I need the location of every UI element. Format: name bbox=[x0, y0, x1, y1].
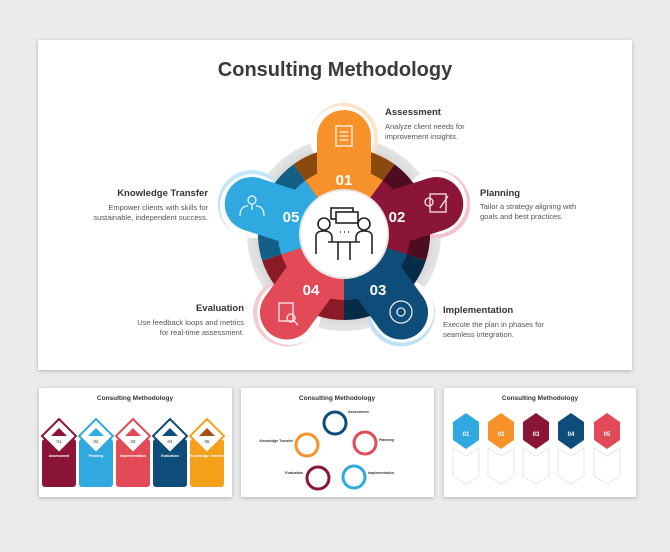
label: Knowledge Transfer bbox=[93, 188, 209, 222]
thumbnail 1: diamond cards: Knowledge Transfer bbox=[190, 454, 224, 458]
numbers: 05 bbox=[283, 209, 299, 226]
icons in lobes bbox=[240, 126, 448, 325]
thumbnail 3: hexagon columns bbox=[444, 388, 636, 497]
thumbnail 1: diamond cards: Implementation bbox=[120, 454, 146, 458]
label: Planning bbox=[480, 188, 576, 221]
label: Knowledge Transfer: Knowledge Transfer bbox=[117, 188, 208, 199]
thumbnail 1: diamond cards: Consulting Methodology bbox=[97, 395, 173, 402]
petal 03 bbox=[313, 211, 448, 357]
thumbnail 3: hexagon columns: 05 bbox=[604, 432, 611, 438]
diagram: five-petal cycle bbox=[209, 103, 479, 360]
label: Planning: goals and best practices. bbox=[480, 212, 563, 221]
label: Evaluation: Use feedback loops and metrics bbox=[137, 318, 244, 327]
halos bbox=[209, 103, 479, 360]
thumbnail 1: diamond cards: 05 bbox=[204, 439, 210, 444]
thumbnail 3: hexagon columns: 03 bbox=[533, 432, 540, 438]
label: Assessment: Analyze client needs for bbox=[385, 122, 465, 131]
numbers: 02 bbox=[389, 209, 405, 226]
petal 01 bbox=[305, 110, 383, 234]
label: Assessment bbox=[385, 107, 465, 141]
thumbnail 2: circular arrows bbox=[241, 388, 434, 497]
center circle with meeting icon bbox=[300, 190, 388, 278]
thumbnail 2: circular arrows: Planning bbox=[379, 438, 394, 442]
thumbnail 1: diamond cards: 04 bbox=[167, 439, 173, 444]
petal 02 bbox=[332, 159, 474, 271]
thumbnail 1: diamond cards: Assessment bbox=[49, 454, 70, 458]
main slide bbox=[38, 40, 632, 370]
label: Implementation bbox=[443, 305, 544, 339]
thumbnail 2: circular arrows: Assessment bbox=[348, 410, 369, 414]
thumbnail 1: diamond cards: Evaluation bbox=[161, 454, 179, 458]
label: Assessment: improvement insights. bbox=[385, 132, 458, 141]
numbers: 04 bbox=[303, 282, 320, 299]
label: Evaluation: for real-time assessment. bbox=[160, 328, 244, 337]
thumbnail 3: hexagon columns: 02 bbox=[498, 432, 505, 438]
thumbnail 1: diamond cards: 03 bbox=[130, 439, 136, 444]
label: Knowledge Transfer: Empower clients with skills for bbox=[108, 203, 209, 212]
label: Evaluation: Evaluation bbox=[196, 303, 244, 314]
numbers: 01 bbox=[336, 172, 352, 189]
thumbnail 1: diamond cards: 01 bbox=[56, 439, 62, 444]
label: Planning: Planning bbox=[480, 188, 520, 199]
thumbnail 1: diamond cards: 02 bbox=[93, 439, 99, 444]
thumbnail 3: hexagon columns: 04 bbox=[568, 432, 575, 438]
thumbnail 3: hexagon columns: 01 bbox=[463, 432, 470, 438]
numbers: 03 bbox=[370, 282, 386, 299]
dark inner ring bbox=[247, 148, 441, 333]
thumbnail 1: diamond cards: Planning bbox=[89, 454, 103, 458]
petal 05 bbox=[214, 159, 356, 271]
thumbnail 2: circular arrows: Knowledge Transfer bbox=[260, 439, 294, 443]
title: Consulting Methodology bbox=[218, 59, 453, 81]
label: Knowledge Transfer: sustainable, independent success. bbox=[93, 213, 208, 222]
label: Implementation: Implementation bbox=[443, 305, 513, 316]
thumbnail 2: circular arrows: Evaluation bbox=[285, 471, 303, 475]
label: Assessment: Assessment bbox=[385, 107, 442, 118]
label: Implementation: Execute the plan in phases for bbox=[443, 320, 544, 329]
thumbnail 1: diamond cards bbox=[39, 388, 232, 497]
thumbnail 2: circular arrows: Consulting Methodology bbox=[299, 395, 375, 402]
label: Implementation: seamless integration. bbox=[443, 330, 514, 339]
thumbnail 2: circular arrows: Implementation bbox=[368, 471, 394, 475]
label: Evaluation bbox=[137, 303, 244, 337]
thumbnail 3: hexagon columns: Consulting Methodology bbox=[502, 395, 578, 402]
petal 04 bbox=[240, 211, 375, 357]
numbers bbox=[283, 172, 405, 299]
label: Planning: Tailor a strategy aligning with bbox=[480, 202, 576, 211]
